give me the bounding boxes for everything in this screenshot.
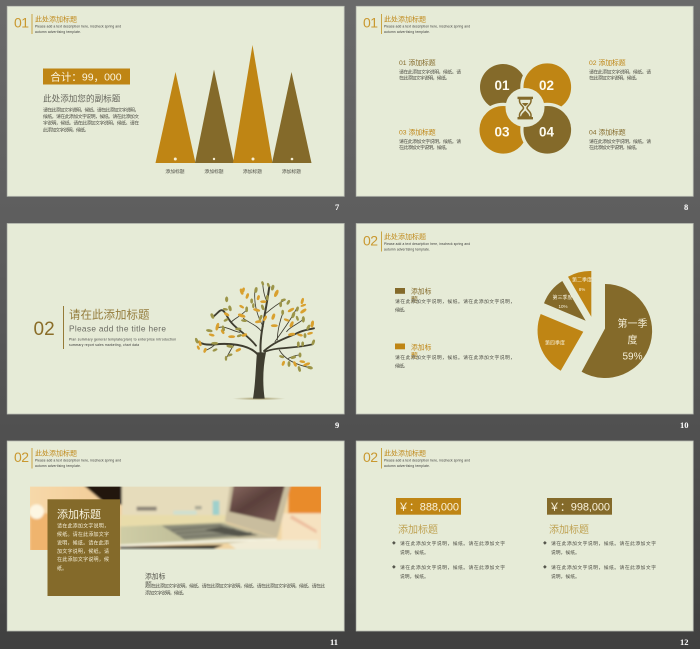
header 02: [14, 448, 121, 468]
brown text card: 在此添加文字说明，候: [57, 556, 109, 563]
header 02: [363, 448, 470, 468]
item 03: 03 添加标题: [399, 128, 436, 136]
item 02: 02 添加标题: [589, 58, 626, 67]
header 02: 此处添加标题: [384, 448, 426, 458]
triangle labels: 添加标题: [204, 168, 224, 175]
section number: 02: [34, 319, 55, 340]
item 03: [399, 128, 461, 151]
legend item 2: 添加标: [411, 342, 432, 352]
four petal diagram: [478, 62, 573, 155]
brown text card: 纸。: [57, 565, 67, 572]
photo: laptop: [28, 485, 323, 552]
legend item 1: [395, 286, 515, 314]
legend item 1: 题: [411, 296, 418, 304]
brown text card: 说明，候纸。请在此添: [57, 540, 109, 546]
header 01: [14, 14, 121, 34]
panel: slide 11 photo: [7, 441, 344, 631]
triangle labels: 添加标题: [282, 168, 301, 175]
item 04: 请在此添加文字说明，候纸。请: [589, 138, 651, 145]
column 2: 请在此添加文字说明，候纸。请在此添加文字: [551, 564, 656, 571]
page number 8: 8: [684, 202, 688, 212]
item 02: 请在此添加文字说明，候纸。请: [589, 68, 651, 76]
page number 9: 9: [335, 420, 339, 430]
page number 12: 12: [680, 637, 688, 647]
column 1: 添加标题: [398, 523, 438, 536]
header 02: Please add a text description here, inscheck spring and: [384, 242, 470, 246]
body text: 候纸。请在此添加文字说明，候纸。请在此添加文: [43, 113, 139, 120]
pie chart: 10%: [558, 304, 568, 309]
header 01: Please add a text description here, inscheck spring and: [35, 24, 121, 28]
pie chart: 第四季度: [545, 340, 565, 346]
pie chart: 59%: [622, 352, 643, 362]
legend item 1: 请在此添加文字说明，候纸。请在此添加文字说明，: [395, 298, 515, 305]
tree gold leaves: [197, 287, 314, 367]
body text: [43, 106, 139, 134]
item 04: 在此添加文字说明，候纸。: [589, 144, 640, 151]
pie chart: 第三季度: [552, 294, 573, 301]
legend item 2: [395, 342, 515, 370]
item 01: 请在此添加文字说明，候纸。请: [399, 68, 461, 76]
section subtitle: Please add the title here: [69, 324, 166, 334]
page number 7: 7: [335, 202, 340, 212]
item 01: 在此添加文字说明，候纸。: [399, 74, 450, 82]
column 2: 说明，候纸。: [551, 573, 580, 580]
header 02: autumn advertising template.: [35, 464, 81, 468]
section small text: Plan summary general template(plan) to enterprise introduction: [69, 338, 176, 342]
header 02: Please add a text description here, inscheck spring and: [384, 458, 470, 462]
header 02: 02: [14, 449, 29, 465]
item 04: [589, 128, 651, 151]
section heading: 请在此添加标题: [69, 308, 150, 322]
panel: slide 12 pricing: [356, 441, 693, 631]
item 01: 01 添加标题: [399, 58, 436, 67]
triangle chart: [156, 45, 312, 163]
caption text: [145, 572, 325, 596]
legend item 1: 候纸。: [395, 306, 408, 314]
header 02: autumn advertising template.: [384, 464, 430, 468]
header 02: 此处添加标题: [384, 232, 426, 241]
caption text: 题: [145, 581, 152, 589]
header 02: autumn advertising template.: [384, 247, 430, 251]
pie chart: 第一季: [618, 317, 648, 330]
pie chart: 度: [628, 334, 638, 346]
header 01: Please add a text description here, inscheck spring and: [384, 24, 470, 28]
brown text card: 请在此添加文字说明，: [57, 522, 109, 530]
brown text card: [48, 499, 120, 596]
item 02: 在此添加文字说明，候纸。: [589, 74, 640, 82]
tree olive leaves: [195, 281, 315, 372]
column 2: 添加标题: [549, 523, 589, 536]
section small text: [69, 338, 176, 347]
panel: slide 9 section title: [7, 224, 344, 414]
panel: slide 7 triangles: [7, 6, 344, 196]
brown text card: 加文字说明，候纸。请: [57, 548, 109, 555]
header 02: 02: [363, 232, 378, 248]
subtitle: 此处添加您的副标题: [43, 92, 121, 104]
column 1: [392, 498, 505, 580]
column 2: ￥：998,000: [549, 502, 610, 514]
column 1: ￥：888,000: [398, 502, 459, 514]
panel: slide 8 petals: [356, 6, 693, 196]
brown text card: 候纸。请在此添加文字: [57, 531, 109, 538]
triangle labels: 添加标题: [243, 168, 262, 175]
column 2: 请在此添加文字说明，候纸。请在此添加文字: [551, 540, 656, 547]
column 2: 说明，候纸。: [551, 549, 580, 556]
icon: hourglass: [518, 97, 533, 119]
header 01: 01: [363, 14, 378, 30]
caption text: 在此添加文字说明，候纸。请在此添加文字说明，候纸。请在此添加文字说明，候纸。请在此: [151, 582, 325, 590]
divider line: [63, 306, 64, 349]
header 02: 02: [363, 449, 378, 465]
four petal diagram: 01: [494, 78, 510, 93]
header 02: 此处添加标题: [35, 448, 77, 458]
page number 11: 11: [330, 637, 338, 647]
column 1: 说明，候纸。: [400, 573, 429, 580]
triangle labels: [165, 168, 301, 175]
four petal diagram: 04: [539, 124, 554, 140]
brown text card: 添加标题: [57, 507, 101, 521]
header 01: 01: [14, 14, 29, 30]
body text: 字说明，候纸。请在此添加文字说明，候纸。请在: [43, 120, 139, 126]
column 2: [543, 498, 656, 580]
section small text: summary report sales marketing, chart data: [69, 343, 139, 347]
caption text: 添加标: [145, 572, 166, 580]
header 01: [363, 14, 470, 34]
item 01: [399, 58, 461, 82]
header 01: 此处添加标题: [384, 14, 426, 24]
pie chart: 8%: [579, 287, 585, 292]
header 02: Please add a text description here, inscheck spring and: [35, 458, 121, 462]
legend item 2: 候纸。: [395, 362, 408, 370]
body text: 此添加文字说明，候纸。: [43, 126, 89, 134]
item 04: 04 添加标题: [589, 128, 626, 136]
panel: slide 10 pie: [356, 224, 693, 414]
icon: tree: [195, 281, 315, 400]
legend item 2: 请在此添加文字说明，候纸。请在此添加文字说明，: [395, 354, 515, 361]
column 1: 请在此添加文字说明，候纸。请在此添加文字: [400, 540, 505, 547]
column 1: 请在此添加文字说明，候纸。请在此添加文字: [400, 564, 505, 571]
legend item 2: 题: [411, 352, 418, 360]
legend item 1: 添加标: [411, 286, 432, 296]
column 1: 说明，候纸。: [400, 549, 429, 556]
pie chart: 第二季度: [572, 276, 592, 284]
page number 10: 10: [680, 420, 688, 430]
four petal diagram: 03: [494, 124, 510, 140]
triangle labels: 添加标题: [165, 168, 185, 175]
header 01: autumn advertising template.: [35, 30, 81, 34]
header 01: 此处添加标题: [35, 14, 77, 24]
item 03: 在此添加文字说明，候纸。: [399, 144, 450, 151]
caption text: 添加文字说明，候纸。: [145, 590, 187, 596]
body text: 请在此添加文字说明，候纸。请在此添加文字说明，: [43, 106, 139, 114]
item 03: 请在此添加文字说明，候纸。请: [399, 138, 461, 145]
pie chart: [538, 271, 652, 378]
total badge: [43, 68, 130, 84]
tree branches: [197, 283, 314, 368]
four petal diagram: 02: [539, 78, 554, 93]
item 02: [589, 58, 651, 82]
header 01: autumn advertising template.: [384, 30, 430, 34]
total badge: 合计：99，000: [50, 70, 122, 84]
header 02: [363, 232, 470, 252]
